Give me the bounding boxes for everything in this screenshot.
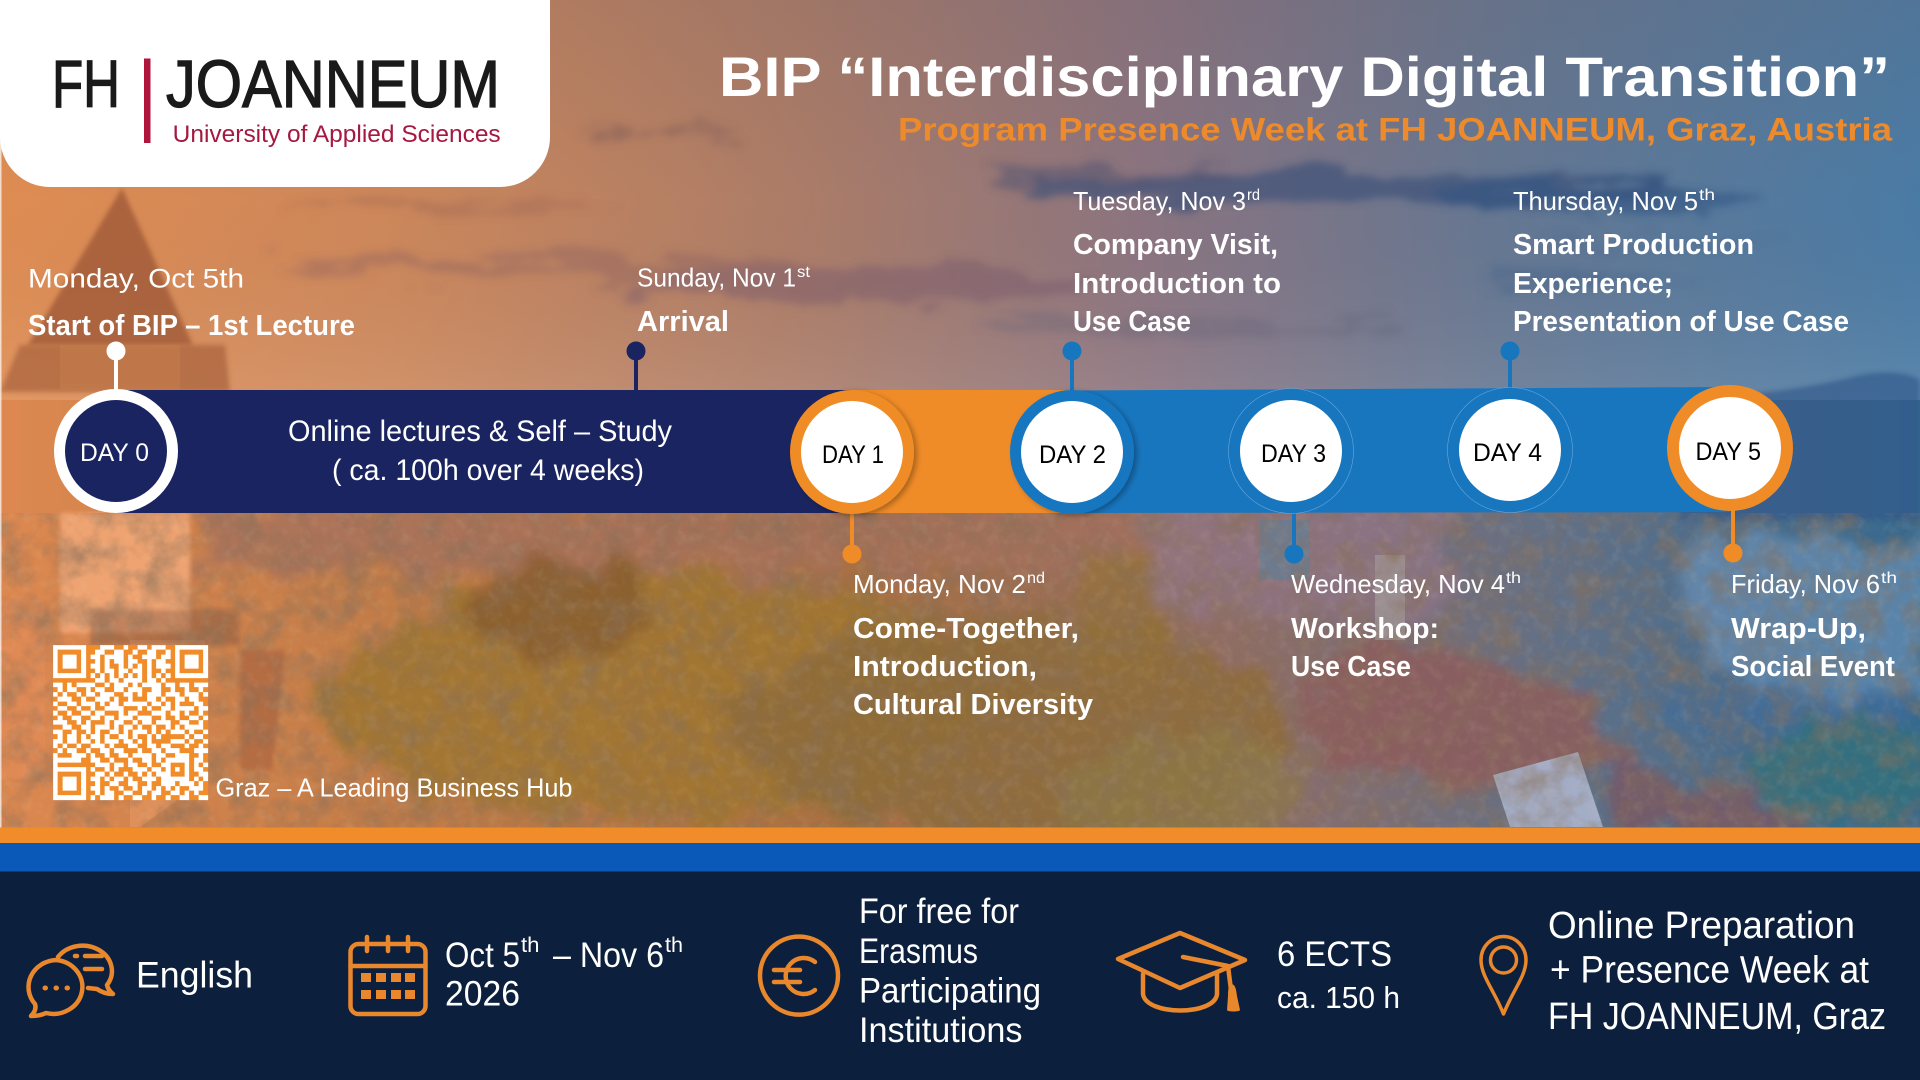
info: location: + Presence Week at <box>1550 950 1869 992</box>
info: credits <box>1277 935 1400 1015</box>
event: smart production: Thursday, Nov 5 <box>1513 186 1698 216</box>
footer panel <box>0 872 1920 1080</box>
day 0 marker <box>54 389 178 513</box>
title: BIP “Interdisciplinary Digital Transition” <box>719 45 1890 108</box>
logo panel <box>0 0 550 187</box>
event: come-together <box>853 569 1093 721</box>
band text: ( ca. 100h over 4 weeks) <box>332 454 644 487</box>
pin: day 4 <box>1500 342 1520 391</box>
icon: euro <box>760 937 838 1015</box>
event: arrival: st <box>797 264 811 281</box>
event: come-together: Introduction, <box>853 651 1037 683</box>
icon: graduation cap <box>1118 933 1245 1012</box>
event: wrap-up: th <box>1881 570 1897 587</box>
info: language: English <box>136 955 253 996</box>
day 4 marker <box>1448 388 1572 512</box>
info: location: FH JOANNEUM, Graz <box>1548 996 1886 1038</box>
band text: Online lectures & Self – Study <box>288 415 672 448</box>
event: come-together: Monday, Nov 2 <box>853 569 1026 599</box>
event: workshop: Use Case <box>1291 651 1411 683</box>
event: company visit: Company Visit, <box>1073 229 1278 261</box>
event: smart production <box>1513 186 1849 338</box>
event: company visit: rd <box>1247 187 1260 204</box>
day 5 marker: DAY 5 <box>1696 438 1761 466</box>
pin: arrival <box>626 342 646 391</box>
event: company visit: Introduction to <box>1073 268 1281 300</box>
event: come-together: Cultural Diversity <box>853 689 1093 721</box>
event: company visit: Use Case <box>1073 306 1191 338</box>
event: start of BIP <box>28 264 355 342</box>
day 1 marker: DAY 1 <box>822 441 884 469</box>
event: wrap-up: Friday, Nov 6 <box>1731 569 1880 599</box>
info: cost: For free for <box>859 892 1019 931</box>
icon: location pin <box>1481 936 1526 1014</box>
info: dates: th <box>521 934 540 957</box>
event: smart production: Presentation of Use Case <box>1513 306 1849 338</box>
event: smart production: Experience; <box>1513 268 1673 300</box>
event: come-together: nd <box>1027 570 1045 587</box>
event: start of BIP: Start of BIP – 1st Lecture <box>28 310 355 342</box>
info: location <box>1548 905 1886 1038</box>
day 2 marker <box>1010 390 1134 514</box>
event: start of BIP: Monday, Oct 5th <box>28 264 244 294</box>
info: dates: – Nov 6 <box>553 936 664 975</box>
event: smart production: Smart Production <box>1513 229 1754 261</box>
pin: day 3 <box>1284 512 1304 564</box>
icon: calendar <box>350 937 426 1014</box>
orange stripe <box>0 828 1920 843</box>
event: workshop: th <box>1506 570 1521 587</box>
pin: day 1 <box>842 513 862 564</box>
band text <box>288 415 672 487</box>
logo divider <box>144 58 150 143</box>
info: cost: Institutions <box>859 1011 1022 1050</box>
event: workshop <box>1291 569 1521 683</box>
event: wrap-up <box>1731 569 1897 683</box>
info: credits: 6 ECTS <box>1277 935 1392 974</box>
pin: day 5 <box>1724 510 1742 562</box>
left edge <box>0 0 2 828</box>
event: arrival: Arrival <box>637 306 729 338</box>
event: arrival: Sunday, Nov 1 <box>637 262 796 292</box>
day 4 marker: DAY 4 <box>1473 439 1542 467</box>
info: location: Online Preparation <box>1548 905 1855 947</box>
logo tagline: University of Applied Sciences <box>173 121 501 148</box>
icon: chat bubbles <box>28 946 113 1016</box>
info: dates: th <box>665 934 683 957</box>
event: arrival <box>637 262 811 338</box>
day 1 marker <box>790 390 914 514</box>
event: workshop: Workshop: <box>1291 613 1439 645</box>
day 3 marker: DAY 3 <box>1261 440 1326 468</box>
background photo: Graz skyline with colour overlay <box>0 0 1920 850</box>
subtitle: Program Presence Week at FH JOANNEUM, Graz, Austria <box>898 112 1892 148</box>
event: company visit <box>1073 186 1281 338</box>
info: cost <box>859 892 1041 1050</box>
event: company visit: Tuesday, Nov 3 <box>1073 186 1246 216</box>
info: dates: Oct 5 <box>445 936 520 975</box>
day 0 marker: DAY 0 <box>80 439 149 467</box>
info: dates: 2026 <box>445 975 520 1014</box>
QR code <box>53 645 208 800</box>
info: credits: ca. 150 h <box>1277 980 1400 1015</box>
day 3 marker <box>1228 388 1354 514</box>
event: workshop: Wednesday, Nov 4 <box>1291 569 1505 599</box>
event: wrap-up: Wrap-Up, <box>1731 613 1866 645</box>
event: smart production: th <box>1699 187 1715 204</box>
day 2 marker: DAY 2 <box>1039 441 1106 469</box>
info: dates <box>445 934 683 1014</box>
event: come-together: Come-Together, <box>853 613 1079 645</box>
logo wordmark FH: FH <box>52 47 120 122</box>
event: wrap-up: Social Event <box>1731 651 1895 683</box>
pin: day 2 <box>1062 342 1082 391</box>
pin: day 0 <box>106 342 126 391</box>
timeline band <box>116 387 1730 513</box>
logo wordmark JOANNEUM: JOANNEUM <box>166 47 500 122</box>
blue stripe <box>0 843 1920 872</box>
info: cost: Erasmus <box>859 932 978 971</box>
QR caption: Graz – A Leading Business Hub <box>216 772 572 802</box>
day 5 marker <box>1667 385 1793 511</box>
info: cost: Participating <box>859 972 1041 1010</box>
